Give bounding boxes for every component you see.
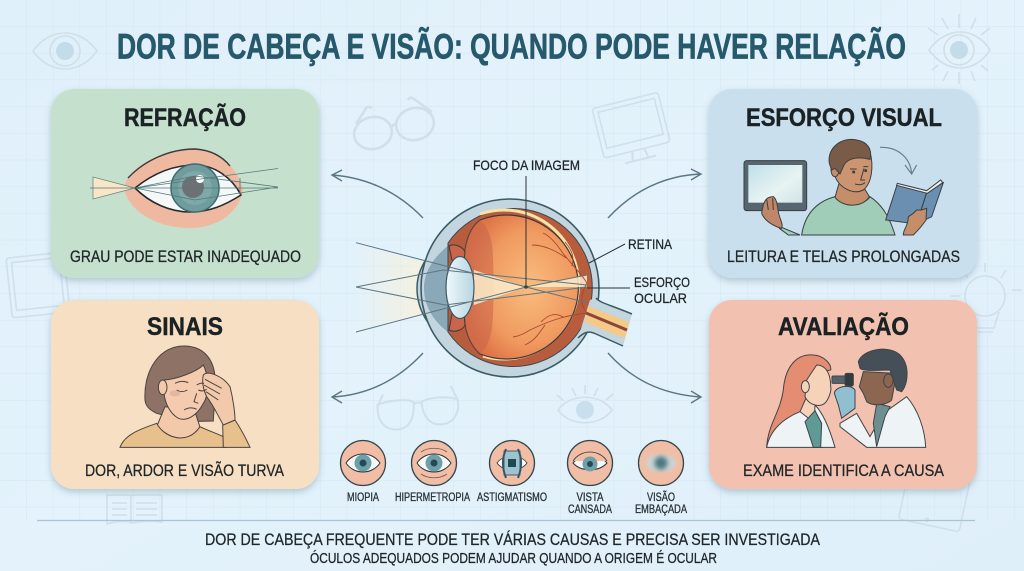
row of vision condition icons bbox=[340, 440, 687, 516]
focus point and leader bbox=[525, 176, 527, 287]
footer bbox=[37, 520, 975, 567]
icon: faint tablet right bbox=[898, 466, 970, 532]
icon: faint glasses top bbox=[351, 98, 437, 153]
label: foco da imagem: FOCO DA IMAGEM bbox=[473, 157, 580, 173]
vitreous body bbox=[464, 215, 578, 359]
heading: sinais: SINAIS bbox=[147, 313, 223, 341]
arrow: to esforço visual bbox=[608, 169, 701, 218]
icon: astigmatismo: ASTIGMATISMO bbox=[477, 492, 547, 504]
illustration: man with tablet and book bbox=[744, 139, 943, 235]
label: esforço ocular: OCULAR bbox=[634, 290, 687, 306]
light rays bbox=[356, 243, 588, 332]
heading: esforço visual: ESFORÇO VISUAL bbox=[746, 104, 942, 132]
icon: visão embaçada: VISÃO bbox=[647, 491, 675, 504]
beam inside eye bbox=[474, 270, 587, 305]
icon: faint eye bottom with rays bbox=[557, 385, 613, 423]
icon: vista cansada bbox=[568, 440, 612, 516]
icon: astigmatismo bbox=[477, 440, 547, 504]
arrow: to refração bbox=[332, 170, 423, 218]
label: esforço ocular: ESFORÇO bbox=[634, 274, 690, 290]
icon: visão embaçada: EMBAÇADA bbox=[635, 504, 687, 516]
icon: visão embaçada bbox=[635, 440, 687, 516]
sclera and cornea bbox=[417, 199, 599, 377]
caption: avaliação: EXAME IDENTIFICA A CAUSA bbox=[743, 461, 945, 480]
arrow: to sinais bbox=[332, 353, 423, 403]
illustration: woman with headache bbox=[120, 346, 250, 447]
diagram: eye anatomy cross-section bbox=[356, 157, 690, 377]
panel: refração bbox=[51, 89, 319, 278]
illustration: eye exam bbox=[767, 349, 926, 447]
ciliary body bbox=[449, 245, 465, 331]
lens bbox=[446, 256, 474, 318]
icon: eye with refraction rays bbox=[90, 149, 278, 228]
icon: faint open book bbox=[107, 495, 162, 524]
caption: refração: GRAU PODE ESTAR INADEQUADO bbox=[70, 247, 301, 266]
caption: esforço visual: LEITURA E TELAS PROLONGADAS bbox=[727, 247, 960, 266]
panel: avaliação bbox=[709, 300, 977, 489]
icon: faint glasses bottom bbox=[376, 385, 460, 431]
label: retina bbox=[589, 236, 673, 263]
icon: faint eye left bbox=[33, 33, 97, 69]
icon: faint tablet left bbox=[6, 252, 70, 318]
label: esforço ocular bbox=[587, 274, 690, 306]
heading: avaliação: AVALIAÇÃO bbox=[778, 311, 909, 341]
caption: sinais: DOR, ARDOR E VISÃO TURVA bbox=[85, 461, 285, 480]
light beam bbox=[356, 245, 445, 332]
label: retina: RETINA bbox=[628, 236, 673, 252]
retina band bbox=[480, 210, 579, 359]
arrows from eye to panels bbox=[332, 169, 701, 403]
icon: hipermetropia: HIPERMETROPIA bbox=[395, 492, 470, 504]
icon: faint light bulb bbox=[950, 263, 1022, 332]
heading: refração: REFRAÇÃO bbox=[124, 102, 246, 132]
icon: miopia bbox=[340, 440, 386, 504]
icon: vista cansada: VISTA bbox=[576, 492, 604, 504]
icon: faint eye right with rays bbox=[928, 14, 990, 84]
icon: vista cansada: CANSADA bbox=[568, 504, 612, 516]
arrow: to avaliação bbox=[608, 353, 701, 403]
footer line 1: DOR DE CABEÇA FREQUENTE PODE TER VÁRIAS CAUSAS E PRECISA SER INVESTIGADA bbox=[205, 530, 821, 549]
icon: faint monitor bbox=[592, 92, 673, 168]
footer line 2: ÓCULOS ADEQUADOS PODEM AJUDAR QUANDO A ORIGEM É OCULAR bbox=[310, 550, 717, 567]
blood vessels bbox=[513, 233, 587, 345]
panel: sinais bbox=[51, 300, 319, 489]
choroid layer bbox=[448, 208, 592, 366]
panel: esforço visual bbox=[709, 89, 977, 278]
icon: hipermetropia bbox=[395, 440, 470, 504]
optic nerve bbox=[578, 298, 632, 346]
icon: miopia: MIOPIA bbox=[347, 492, 379, 504]
